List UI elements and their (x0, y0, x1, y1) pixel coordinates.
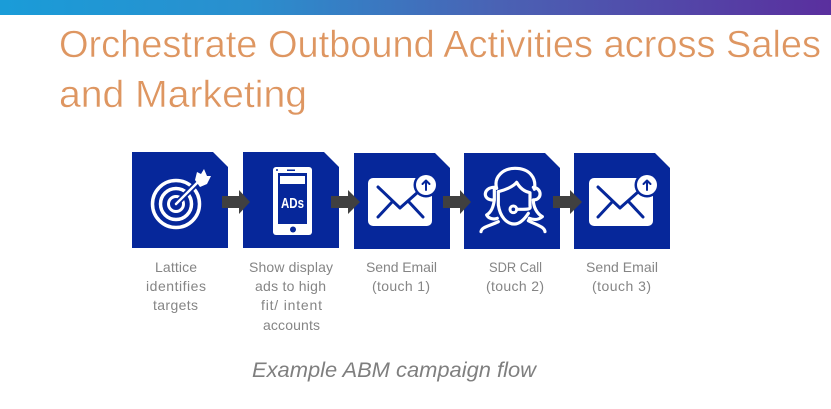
step 2 tile: phone ads icon: ADs (281, 195, 304, 212)
label: step 1 (146, 259, 206, 313)
step 2 tile: phone ads icon (243, 152, 339, 248)
step 1 tile: target icon (132, 152, 228, 248)
arrow 4 (553, 190, 582, 214)
label: step 1: targets (153, 297, 198, 313)
arrow 3 (443, 190, 471, 214)
label: step 2: Show display (249, 259, 333, 275)
label: step 2 (249, 259, 333, 333)
label: step 5 (586, 259, 658, 294)
label: step 1: Lattice (155, 259, 197, 275)
label: step 3 (366, 259, 437, 294)
caption: Example ABM campaign flow (252, 359, 538, 382)
label: step 4 (486, 259, 544, 294)
label: step 3: Send Email (366, 259, 437, 275)
title: Orchestrate Outbound Activities across Sales (59, 24, 821, 66)
step 5 tile: email icon (574, 153, 670, 249)
label: step 2: ads to high (255, 278, 326, 294)
label: step 3: (touch 1) (372, 278, 430, 294)
arrow 2 (331, 190, 360, 214)
label: step 2: fit/ intent (261, 297, 322, 313)
arrow 1 (222, 190, 250, 214)
title (59, 24, 821, 116)
label: step 4: SDR Call (489, 259, 542, 275)
label: step 5: (touch 3) (592, 278, 651, 294)
step 3 tile: email icon (354, 153, 450, 249)
label: step 2: accounts (263, 317, 320, 333)
label: step 4: (touch 2) (486, 278, 544, 294)
top gradient banner (0, 0, 831, 15)
title: and Marketing (59, 74, 307, 116)
label: step 1: identifies (146, 278, 206, 294)
step 4 tile: SDR agent icon (464, 153, 560, 249)
label: step 5: Send Email (586, 259, 658, 275)
